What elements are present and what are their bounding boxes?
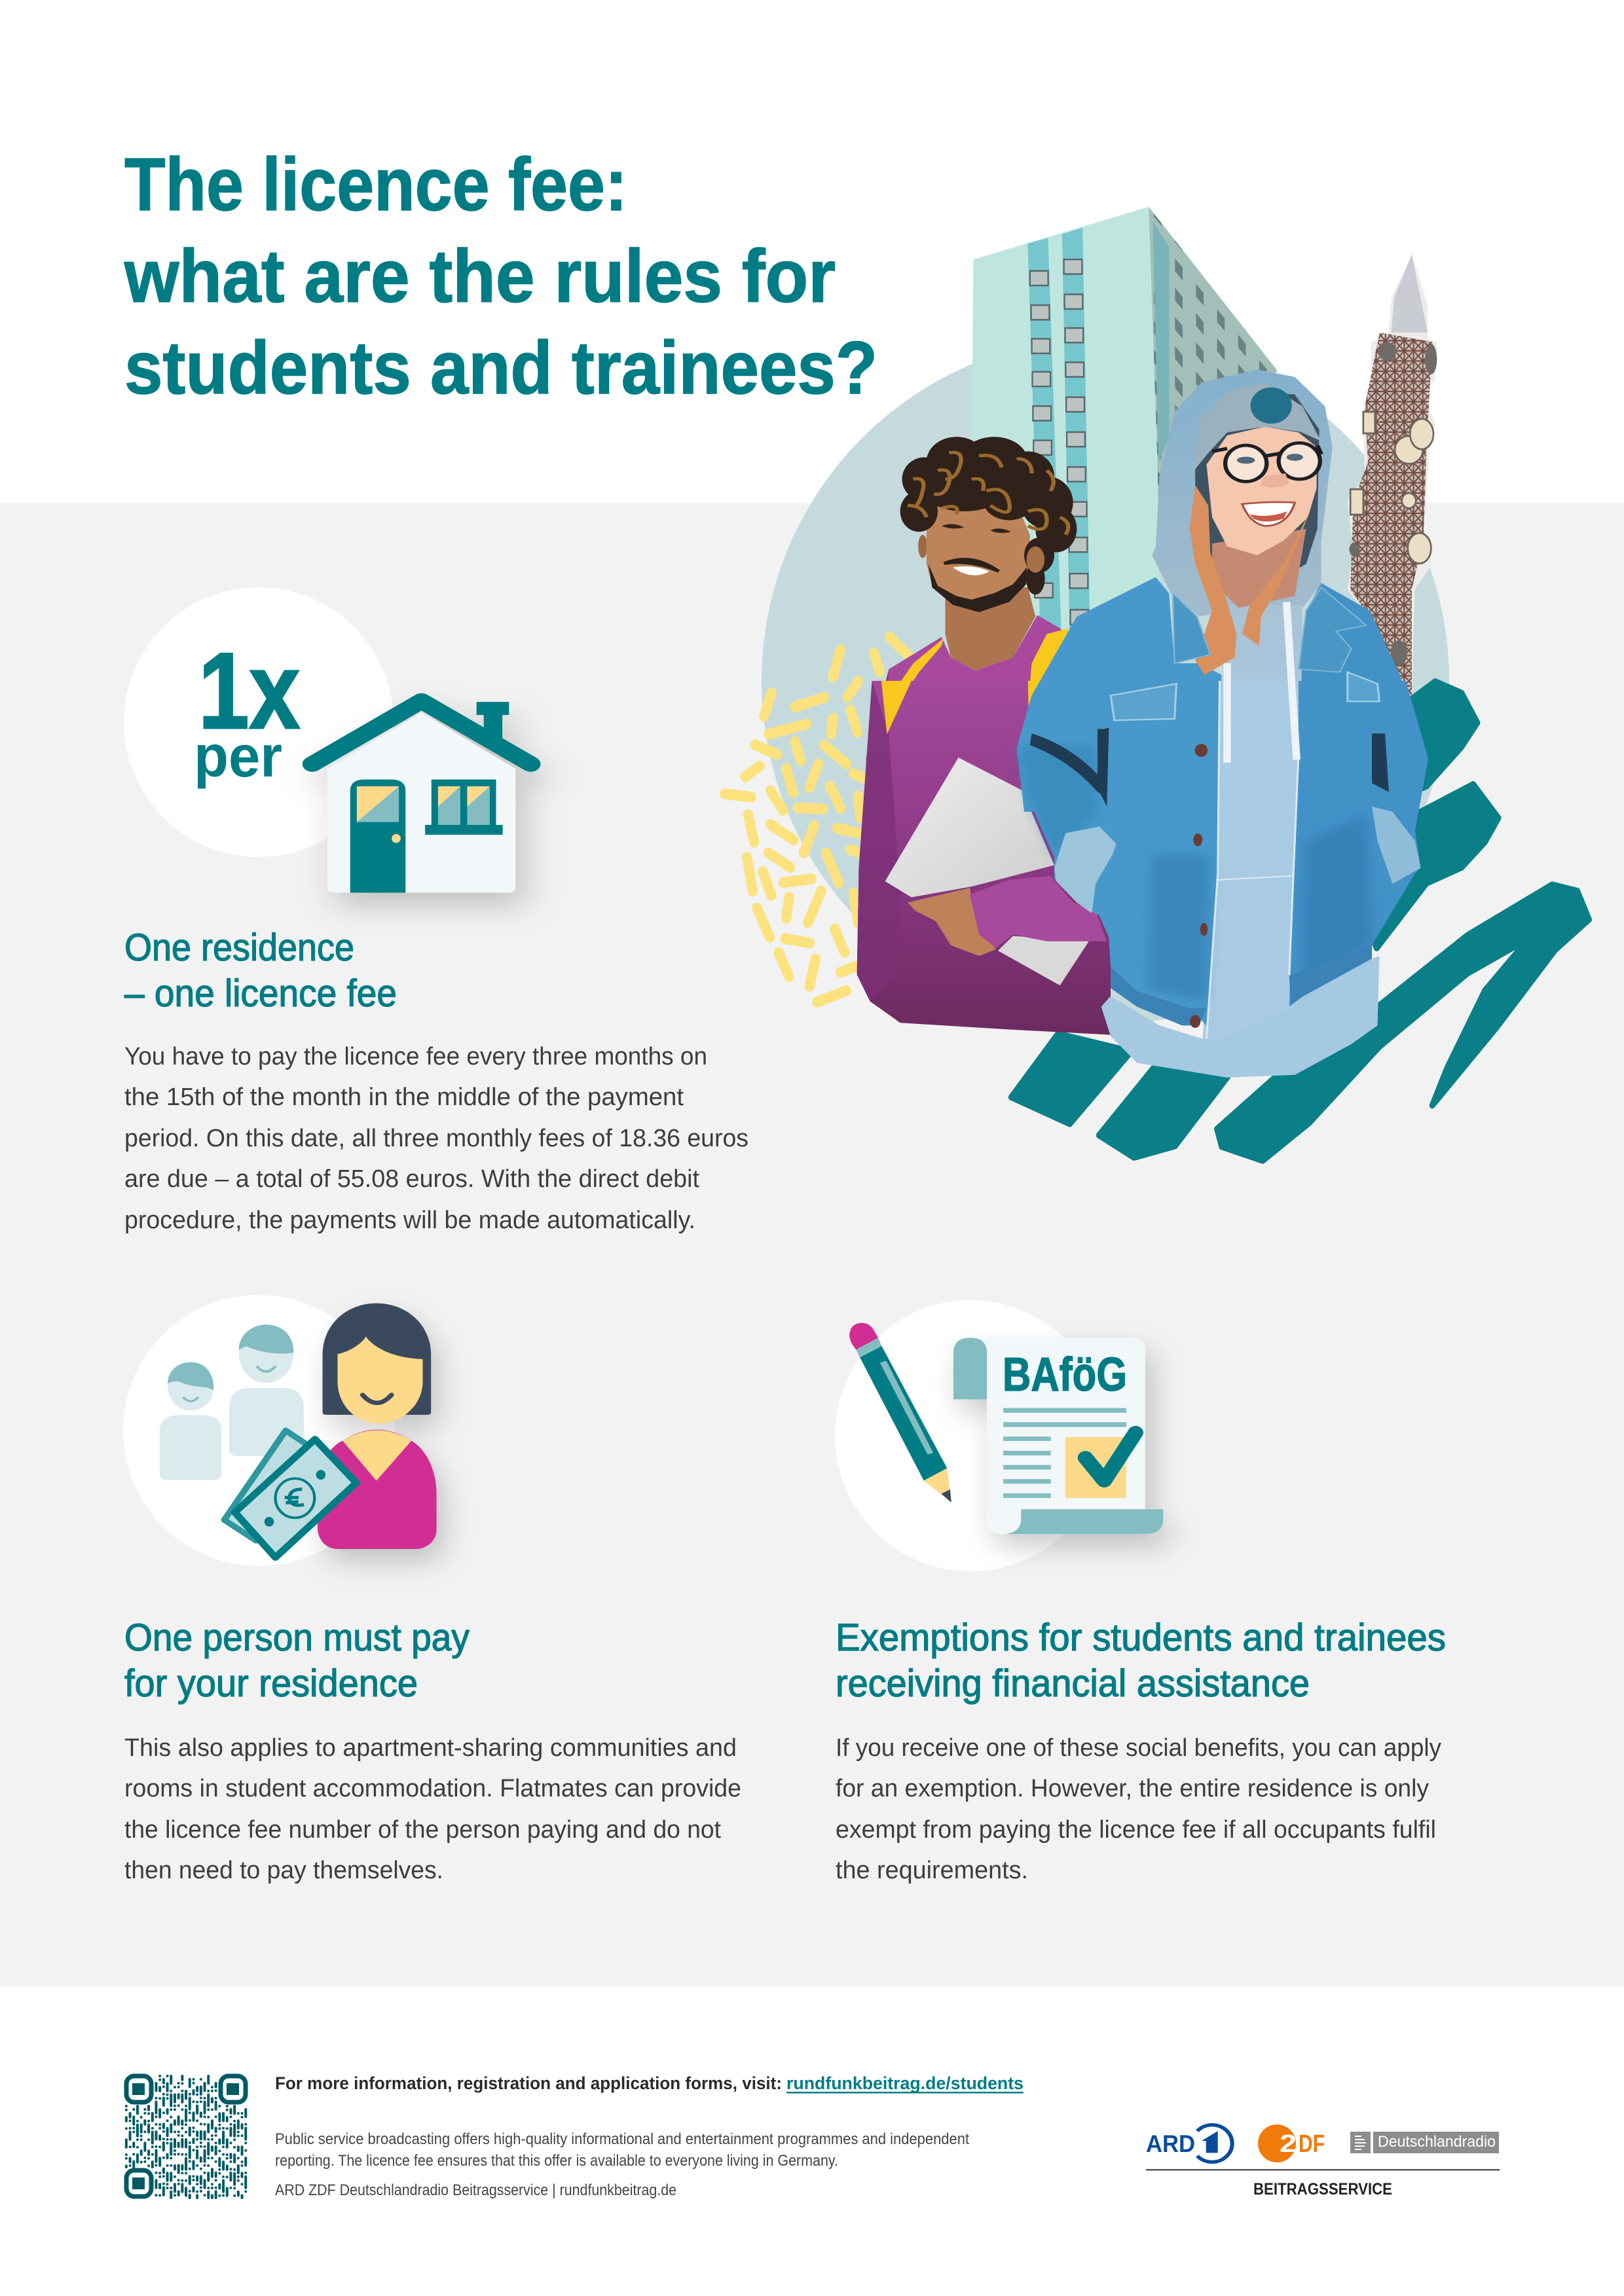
man upper body and head [866, 437, 1077, 812]
apartment building [970, 207, 1278, 666]
more information line: For more information, registration and application forms, visit: [275, 2073, 782, 2093]
heading: exemptions [836, 1616, 1446, 1705]
logo: ARD: ARD [1146, 2130, 1195, 2157]
body text: exemption conditions: If you receive one of these social benefits, you can apply [836, 1734, 1441, 1762]
body text: exemption conditions: for an exemption. However, the entire residence is only [836, 1775, 1429, 1802]
body text: payment rule: the 15th of the month in the middle of the payment [124, 1084, 684, 1111]
icon backdrop circle [123, 1295, 394, 1566]
body text: exemption conditions: the requirements. [836, 1857, 1028, 1884]
woman upper body: hood, face, hair [1017, 370, 1428, 812]
body text: payment rule [124, 1043, 748, 1234]
student: man [857, 437, 1111, 1035]
icon: BAfoeG document and pencil [835, 1300, 1163, 1571]
page background: grey content panel [0, 503, 1624, 1986]
heading: exemptions: Exemptions for students and trainees [836, 1616, 1446, 1659]
logo: ZDF [1258, 2124, 1325, 2162]
public broadcasting note [275, 2130, 969, 2170]
hero backdrop circle [762, 337, 1449, 1025]
label: per: per [194, 724, 282, 790]
logo: ZDF: DF [1299, 2130, 1325, 2158]
hero collage [725, 207, 1589, 1161]
telecom tower [1348, 255, 1437, 697]
section: one residence [124, 587, 748, 1234]
yellow confetti dashes [725, 637, 909, 1002]
heading: one residence: One residence [124, 926, 354, 969]
label: BAfoeG: BAföG [1003, 1349, 1127, 1401]
icon: people with money [123, 1295, 437, 1566]
logo text: BEITRAGSSERVICE: BEITRAGSSERVICE [1253, 2180, 1392, 2198]
logo: ARD [1146, 2125, 1232, 2162]
man lower body with laptop [857, 681, 1111, 1035]
body text: apartment sharing: This also applies to apartment-sharing communities and [124, 1734, 737, 1762]
link: rundfunkbeitrag.de/students: rundfunkbeitrag.de/students [786, 2073, 1024, 2093]
logo: Deutschlandradio [1350, 2132, 1499, 2153]
title: The licence fee: [124, 143, 627, 227]
body text: apartment sharing: the licence fee number of the person paying and do not [124, 1816, 721, 1844]
logos [1146, 2124, 1500, 2198]
title: students and trainees? [124, 327, 877, 410]
section: one person must pay [123, 1295, 741, 1884]
icon backdrop circle [835, 1300, 1106, 1571]
sender line: ARD ZDF Deutschlandradio Beitragsservice | rundfunkbeitrag.de [275, 2181, 676, 2199]
heading: one residence [124, 926, 397, 1015]
body text: apartment sharing: then need to pay themselves. [124, 1857, 443, 1884]
heading: one residence: – one licence fee [124, 972, 397, 1015]
body text: apartment sharing: rooms in student accommodation. Flatmates can provide [124, 1775, 741, 1802]
icon: 1x per house [124, 587, 530, 893]
public broadcasting note: Public service broadcasting offers high-quality informational and entertainment programmes and independent [275, 2130, 969, 2148]
body text: apartment sharing [124, 1734, 741, 1884]
body text: payment rule: procedure, the payments will be made automatically. [124, 1207, 695, 1234]
heading: exemptions: receiving financial assistance [836, 1662, 1310, 1705]
QR code [126, 2076, 246, 2198]
public broadcasting note: reporting. The licence fee ensures that this offer is available to everyone living in Germany. [275, 2152, 838, 2170]
heading: one person must pay [124, 1616, 470, 1705]
title [124, 143, 877, 410]
body text: payment rule: are due – a total of 55.08 euros. With the direct debit [124, 1165, 699, 1193]
body text: payment rule: You have to pay the licence fee every three months on [124, 1043, 707, 1070]
woman jacket details: collar, pockets, drawstrings [1030, 587, 1389, 798]
logo: ZDF: 2 [1280, 2130, 1297, 2158]
heading: one person must pay: One person must pay [124, 1616, 470, 1659]
student: woman [1017, 370, 1428, 1078]
page background: white header [0, 0, 1624, 503]
woman lower body: jacket, hoodie, cuffs [1018, 681, 1428, 1078]
label: 1x: 1x [198, 630, 300, 751]
title: what are the rules for [124, 235, 836, 318]
teal brush strokes [1011, 682, 1589, 1161]
body text: payment rule: period. On this date, all three monthly fees of 18.36 euros [124, 1125, 748, 1152]
body text: exemption conditions: exempt from paying the licence fee if all occupants fulfil [836, 1816, 1436, 1844]
footer [126, 2073, 1500, 2199]
house [312, 701, 530, 893]
section: exemptions [835, 1300, 1446, 1884]
body text: exemption conditions [836, 1734, 1441, 1884]
logo: Deutschlandradio: Deutschlandradio [1378, 2133, 1496, 2151]
icon backdrop circle [124, 587, 394, 857]
heading: one person must pay: for your residence [124, 1662, 418, 1705]
